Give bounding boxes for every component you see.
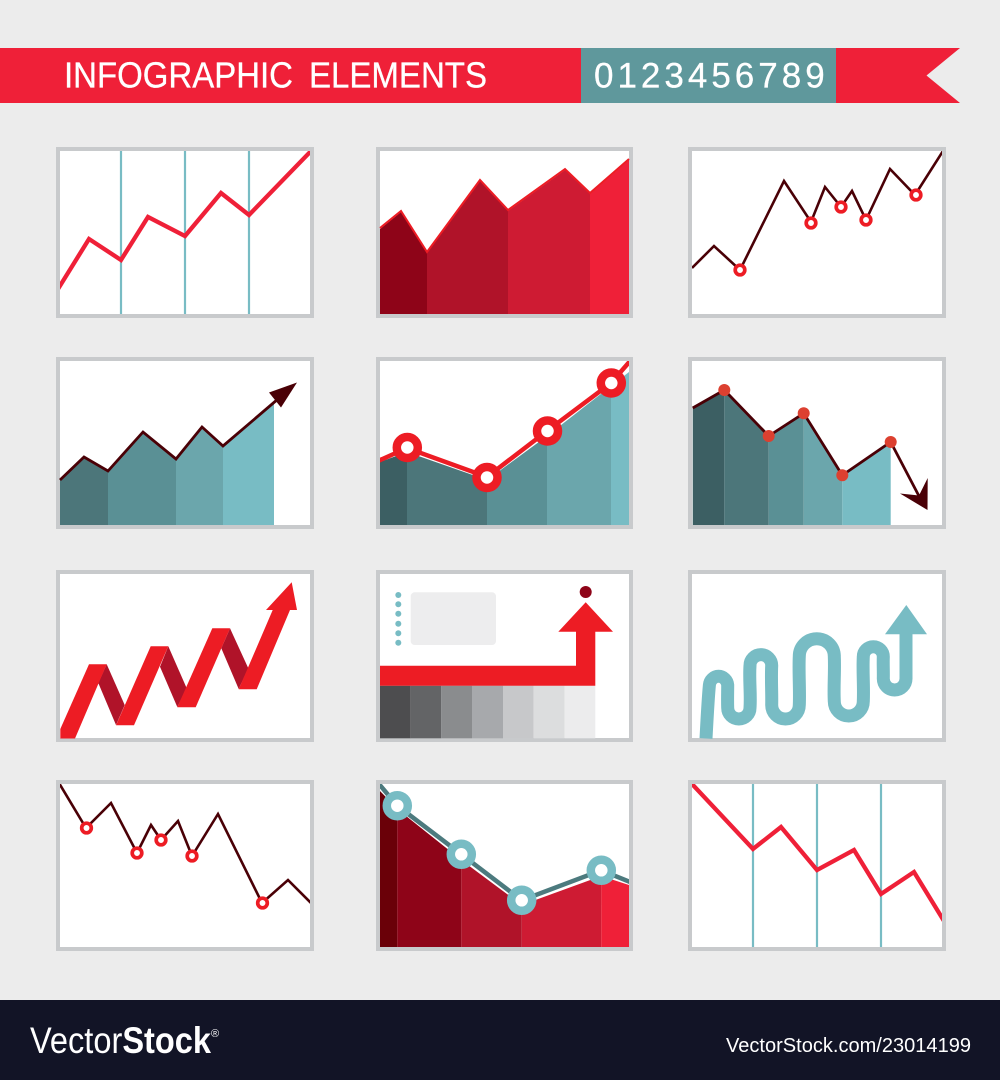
area bands xyxy=(60,402,274,525)
ribbon xyxy=(0,48,960,103)
logo: VectorStock xyxy=(30,1020,211,1061)
digits: 0123456789 xyxy=(594,56,829,96)
line xyxy=(693,390,920,498)
grey steps xyxy=(380,686,595,738)
number block xyxy=(581,48,836,103)
bullet dots xyxy=(395,592,401,646)
registered mark: ® xyxy=(211,1028,219,1040)
area bands xyxy=(693,390,891,525)
title xyxy=(64,54,487,96)
red strips and arrow xyxy=(60,582,297,738)
panel: dark line with ring markers xyxy=(690,149,944,316)
panel: red line with grid xyxy=(58,149,312,316)
area bands xyxy=(380,372,629,525)
panel: teal area rising arrow xyxy=(58,359,312,527)
dark dot xyxy=(580,586,592,598)
markers xyxy=(397,372,622,488)
line xyxy=(58,150,312,289)
arrow head xyxy=(269,382,297,408)
footer xyxy=(0,1000,1000,1080)
panel: wavy teal arrow xyxy=(690,572,944,740)
panel: red area chart xyxy=(378,149,631,316)
panel: falling red line with grid xyxy=(690,782,944,949)
area bands xyxy=(380,160,629,314)
panel: falling dark line with ring markers xyxy=(58,782,312,949)
arrow head xyxy=(900,478,928,510)
line xyxy=(692,151,943,270)
text placeholder xyxy=(411,592,496,645)
panel: teal area with red ring markers xyxy=(378,359,631,527)
title: ELEMENTS xyxy=(309,54,487,96)
line xyxy=(379,784,630,900)
grid lines xyxy=(121,151,249,314)
markers xyxy=(735,190,921,275)
markers xyxy=(82,823,267,908)
arrow head xyxy=(885,605,927,634)
banner xyxy=(0,48,960,103)
panel: teal area falling arrow xyxy=(690,359,944,527)
title: INFOGRAPHIC xyxy=(64,54,293,96)
dark folds xyxy=(98,628,248,725)
red arrow xyxy=(380,602,613,686)
panel: zigzag ribbon arrow xyxy=(58,572,312,740)
line xyxy=(60,399,278,480)
line xyxy=(59,783,311,903)
image id: VectorStock.com/23014199 xyxy=(726,1035,971,1057)
area bands xyxy=(380,791,629,947)
grid lines xyxy=(753,784,881,947)
line xyxy=(380,159,629,252)
panel: corner arrow with grey steps xyxy=(378,572,631,740)
markers xyxy=(718,384,897,481)
markers xyxy=(387,795,612,911)
wavy line xyxy=(706,630,906,738)
line xyxy=(692,784,944,921)
line xyxy=(378,360,631,477)
panel: red area with teal ring markers xyxy=(378,782,631,949)
